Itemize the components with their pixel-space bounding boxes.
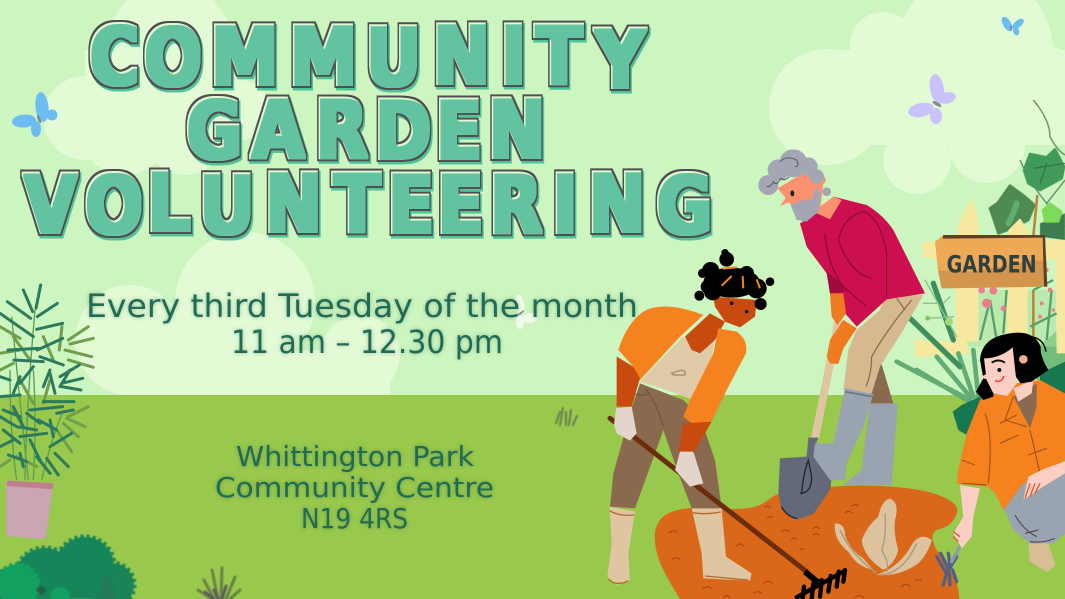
garden sign: GARDEN bbox=[947, 250, 1037, 278]
butterfly: white bbox=[514, 293, 537, 329]
text block: date and time: 11 am – 12.30 pm bbox=[231, 323, 503, 361]
gloves bbox=[614, 407, 637, 441]
title bbox=[24, 9, 712, 252]
text block: location: N19 4RS bbox=[301, 502, 408, 535]
jacket bbox=[618, 307, 703, 380]
text block: location bbox=[215, 440, 494, 535]
front boot bbox=[813, 388, 873, 480]
person: man digging bbox=[758, 149, 925, 520]
tank top bbox=[640, 337, 715, 400]
bush bottom left bbox=[0, 537, 134, 599]
gloves bbox=[830, 293, 846, 325]
title: VOLUNTEERING bbox=[24, 156, 712, 252]
neck bbox=[1013, 380, 1033, 402]
head bbox=[713, 297, 757, 327]
title: GARDEN bbox=[186, 83, 545, 177]
grass tuft small bbox=[556, 408, 577, 425]
title: COMMUNITY bbox=[89, 9, 646, 106]
plant pot bbox=[6, 481, 53, 539]
grass tuft lower bbox=[198, 568, 240, 599]
face details bbox=[730, 302, 748, 313]
arms bbox=[617, 357, 640, 407]
text block: date and time: Every third Tuesday of the month bbox=[86, 287, 638, 325]
vine bbox=[1020, 100, 1065, 227]
tee bbox=[1013, 383, 1037, 428]
shovel head bbox=[778, 438, 833, 520]
hair bbox=[976, 333, 1048, 400]
shoe bbox=[1028, 543, 1056, 572]
butterfly: small blue bbox=[1000, 15, 1026, 36]
back boot bbox=[843, 403, 898, 485]
text block: location: Community Centre bbox=[215, 471, 494, 504]
garden flowers bbox=[978, 268, 1055, 319]
grass ground bbox=[0, 395, 1065, 599]
back sleeve bbox=[827, 272, 845, 293]
potted bamboo plant bbox=[0, 285, 93, 539]
text block: date and time bbox=[86, 287, 638, 361]
person: woman raking bbox=[607, 249, 845, 599]
text block: location: Whittington Park bbox=[236, 440, 475, 473]
illustration: gardeners group bbox=[607, 100, 1065, 599]
soil marks bbox=[669, 505, 921, 597]
boots bbox=[607, 507, 635, 585]
trousers bbox=[843, 295, 923, 393]
face bbox=[984, 347, 1017, 396]
plant stems near flowers bbox=[980, 280, 1057, 340]
hand fork bbox=[937, 543, 962, 585]
foliage behind fence bbox=[967, 213, 1065, 380]
shovel handle bbox=[815, 310, 841, 438]
shirt bbox=[957, 380, 1065, 510]
hair bbox=[694, 249, 774, 310]
beard bbox=[791, 185, 821, 222]
hair bbox=[758, 149, 831, 196]
arm bbox=[953, 485, 980, 548]
neck and head bbox=[813, 197, 842, 219]
person: crouching woman bbox=[953, 333, 1065, 572]
hair ties bbox=[722, 267, 760, 288]
dark bush behind woman bbox=[953, 362, 1065, 435]
back leg bbox=[870, 353, 893, 403]
uprooted plant bbox=[835, 498, 932, 575]
sweater bbox=[800, 197, 925, 327]
rake bbox=[610, 418, 807, 572]
sky background bbox=[0, 0, 1065, 396]
stem with lime leaf bbox=[1033, 195, 1062, 337]
trousers bbox=[610, 383, 722, 508]
trousers bbox=[1003, 467, 1065, 543]
butterfly: blue left bbox=[11, 91, 57, 137]
butterfly: purple bbox=[907, 73, 957, 124]
spiky plant bbox=[897, 280, 992, 400]
chest bbox=[685, 313, 725, 353]
leaf: dark bbox=[990, 186, 1034, 233]
garden sign bbox=[935, 235, 1047, 288]
fence bbox=[913, 197, 1065, 357]
leaf: large top right bbox=[1024, 149, 1065, 190]
cloud: lower centre bbox=[75, 232, 400, 400]
cloud: top left bbox=[43, 0, 270, 175]
soil patch bbox=[655, 486, 959, 599]
knee hand bbox=[1023, 462, 1065, 500]
cloud: top right bbox=[769, 0, 1065, 194]
